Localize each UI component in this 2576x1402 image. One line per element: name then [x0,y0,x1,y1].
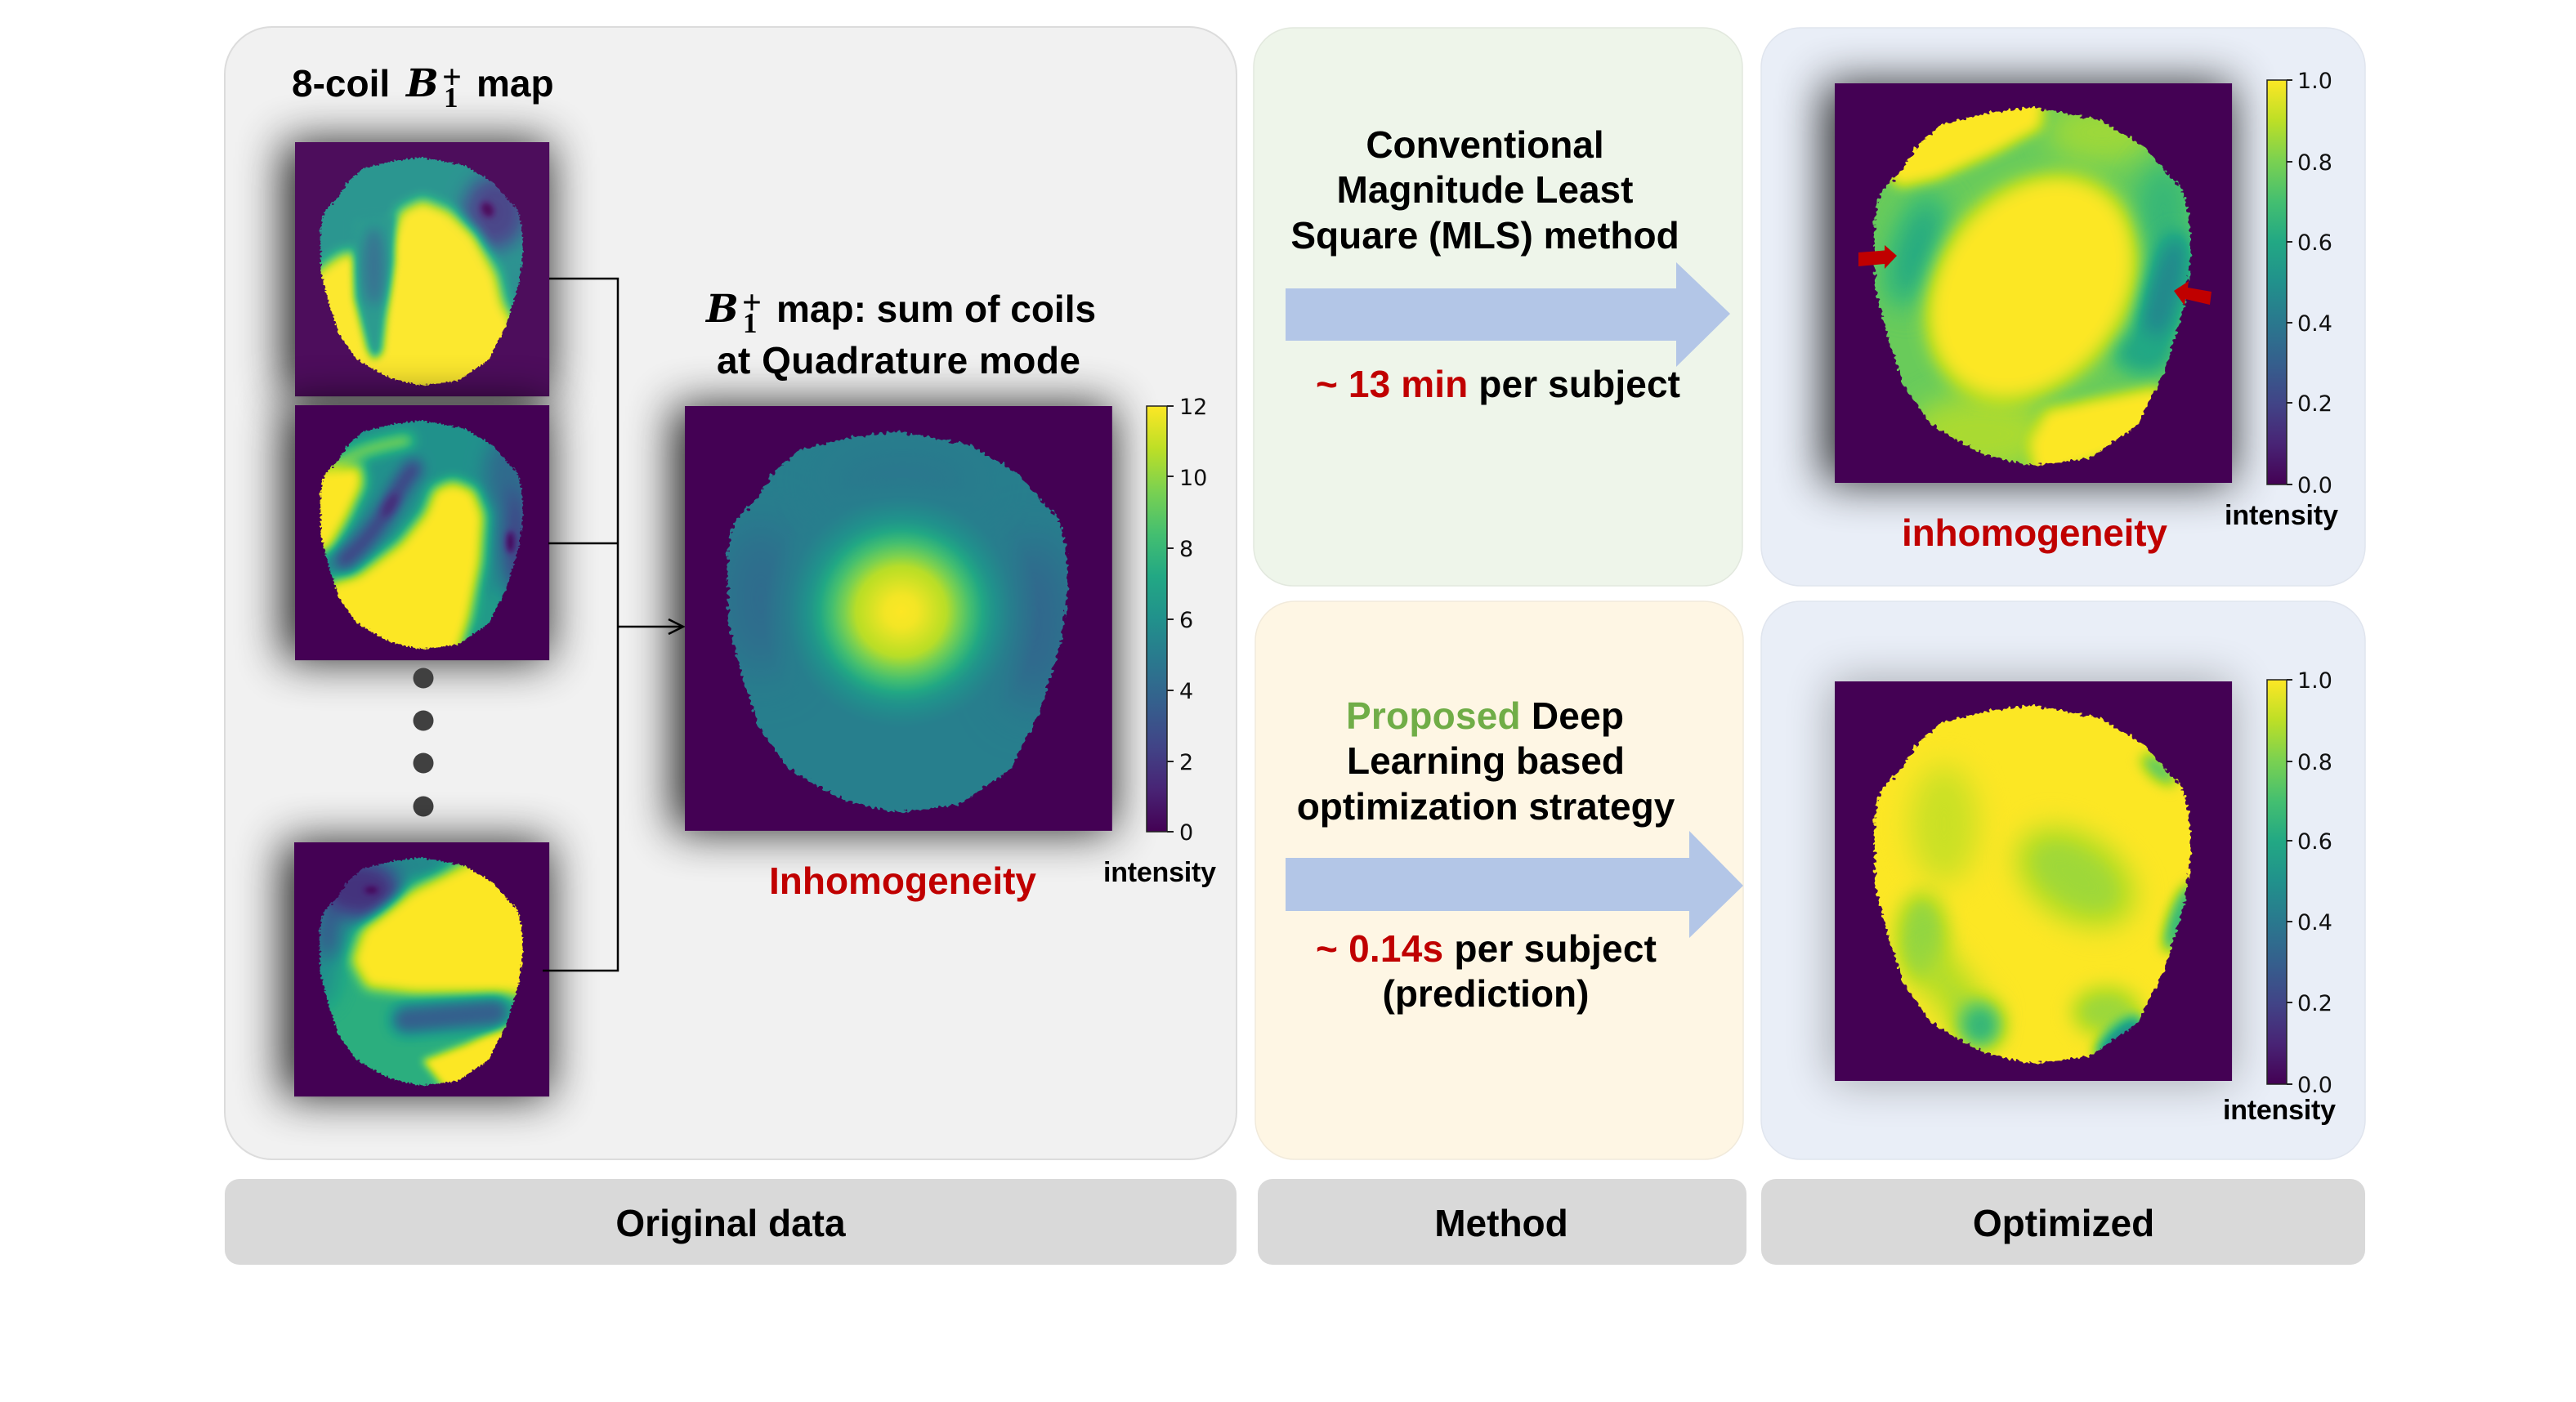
label: inhomogeneity: inhomogeneity [1902,511,2167,554]
colorbar: 0 to 12: 0 [1179,820,1193,846]
dots: ellipsis between coils [414,668,433,817]
arrow: right red [2174,281,2212,306]
text: 13 min per subject: ~ 13 min per subject [1316,363,1680,405]
heading: 8-coil B1+ map: 8-coil [292,62,390,105]
heatmap: MLS result [1823,83,2232,483]
heatmap: coil 2 [284,405,549,660]
text: 0.14s per subject [1316,927,1657,1015]
label: intensity: intensity [1103,857,1216,888]
footer: original data: Original data [615,1202,846,1244]
colorbar: 0 to 1: 1.0 [2297,668,2332,694]
heading: sum of coils: at Quadrature mode [717,339,1080,382]
heading: 8-coil B1+ map [292,59,554,114]
colorbar: 0 to 12: 6 [1179,608,1193,633]
footer: optimized: Optimized [1973,1202,2154,1244]
text: conventional MLS: Magnitude Least [1337,168,1633,211]
panel: optimized conventional [1761,28,2365,586]
text: 0.14s per subject: (prediction) [1383,972,1589,1015]
heatmap: coil 1 [284,142,549,397]
footer: original data [225,1179,1237,1265]
panel: optimized proposed [1761,601,2365,1159]
heading: sum of coils: + [742,284,762,322]
footer: optimized [1761,1179,2365,1265]
heading: 8-coil B1+ map: 1 [444,82,458,114]
colorbar: 0 to 1 [2267,69,2332,498]
colorbar: 0 to 1: 0.8 [2297,150,2332,176]
colorbar: 0 to 1: 0.6 [2297,230,2332,256]
arrow: proposed [1286,831,1743,938]
colorbar: 0 to 12: 8 [1179,537,1193,562]
colorbar: 0 to 1 [2267,668,2332,1098]
colorbar: 0 to 12: 2 [1179,750,1193,775]
heading: 8-coil B1+ map: B [405,61,439,106]
colorbar: 0 to 1: 0.6 [2297,829,2332,855]
heatmap: DL result [1831,681,2232,1081]
heading: sum of coils: B [704,287,739,332]
colorbar: 0 to 12: 4 [1179,679,1193,704]
arrow: conventional [1286,262,1730,367]
arrow: left red [1858,245,1897,269]
colorbar: 0 to 1: 1.0 [2297,69,2332,94]
colorbar: 0 to 1: 0.8 [2297,750,2332,775]
colorbar: 0 to 12: 10 [1179,466,1207,491]
label: intensity: intensity [2225,500,2338,531]
label: Inhomogeneity: Inhomogeneity [769,860,1036,902]
heading: 8-coil B1+ map: map [476,62,554,105]
text: conventional MLS: Conventional [1366,123,1604,166]
heading: sum of coils [704,284,1096,382]
colorbar: 0 to 1: 0.2 [2297,391,2332,417]
text: conventional MLS: Square (MLS) method [1290,214,1679,257]
colorbar: 0 to 12 [1147,395,1207,846]
colorbar: 0 to 12: 12 [1179,395,1207,420]
text: proposed deep learning: Proposed Deep [1346,694,1624,737]
footer: method: Method [1434,1202,1568,1244]
text: proposed deep learning: optimization strategy [1297,785,1675,828]
heading: 8-coil B1+ map: + [442,59,462,96]
colorbar: 0 to 1: 0.0 [2297,1073,2332,1098]
colorbar: 0 to 1: 0.0 [2297,473,2332,498]
text: 0.14s per subject: ~ 0.14s per subject [1316,927,1657,970]
heatmap: coil 8 [283,842,549,1096]
panel: proposed method [1255,601,1743,1159]
footer: method [1258,1179,1746,1265]
colorbar: 0 to 1: 0.4 [2297,311,2332,337]
text: conventional MLS [1290,123,1679,257]
heading: sum of coils: map: sum of coils [776,288,1096,330]
text: proposed deep learning: Learning based [1347,739,1625,782]
connector lines [543,279,683,971]
heading: sum of coils: 1 [743,307,757,339]
heatmap: quadrature sum [673,406,1112,831]
panel: original data [225,27,1237,1159]
panel: conventional method [1254,28,1742,586]
colorbar: 0 to 1: 0.2 [2297,991,2332,1016]
colorbar: 0 to 1: 0.4 [2297,910,2332,935]
label: intensity: intensity [2223,1095,2336,1126]
text: proposed deep learning [1297,694,1675,828]
